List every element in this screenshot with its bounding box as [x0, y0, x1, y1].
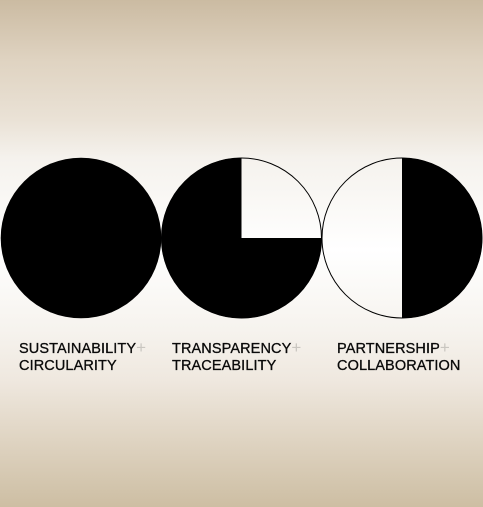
- label: partnership and collaboration: [337, 338, 461, 374]
- label: sustainability and circularity: CIRCULARITY: [19, 358, 117, 374]
- label: transparency and traceability: TRACEABILITY: [172, 358, 276, 374]
- label: sustainability and circularity: SUSTAINABILITY+: [19, 338, 146, 357]
- label: transparency and traceability: [172, 338, 301, 374]
- circle: transparency, three-quarters filled: [161, 158, 322, 318]
- circle: partnership, half filled: [322, 158, 482, 318]
- circle: sustainability, fully filled: [1, 158, 161, 318]
- label: partnership and collaboration: PARTNERSHIP+: [337, 338, 450, 357]
- label: partnership and collaboration: COLLABORATION: [337, 358, 461, 374]
- label: sustainability and circularity: [19, 338, 146, 374]
- label: transparency and traceability: TRANSPARENCY+: [172, 338, 301, 357]
